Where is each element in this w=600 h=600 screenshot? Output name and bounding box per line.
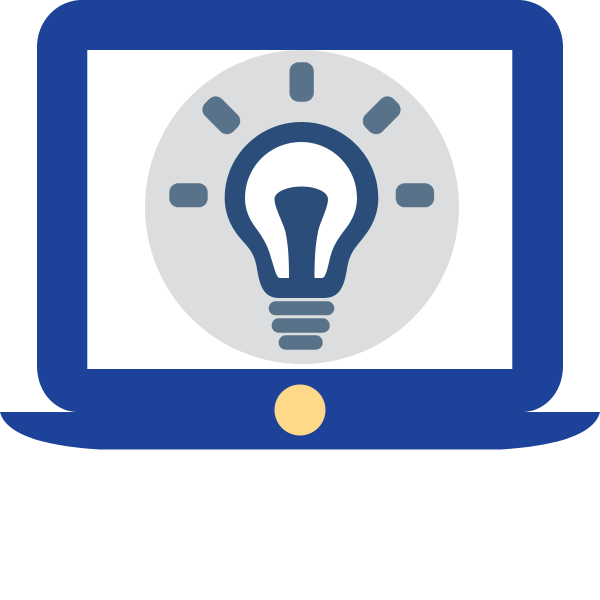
ray: top left	[199, 93, 244, 138]
laptop	[0, 0, 600, 450]
base ring 3	[279, 335, 323, 350]
ray: left	[169, 183, 208, 207]
ray: right	[396, 183, 434, 207]
grey circle background	[145, 50, 459, 364]
ray: top	[290, 62, 314, 102]
laptop screen	[87, 50, 512, 369]
base ring 2	[272, 318, 330, 333]
base ring 1	[269, 301, 334, 315]
laptop base	[0, 412, 600, 450]
bulb glass outline	[225, 122, 378, 298]
laptop body	[37, 0, 563, 412]
power button	[274, 384, 326, 436]
bulb screw base	[269, 301, 334, 350]
ray: top right	[359, 93, 404, 138]
light bulb icon	[145, 50, 459, 364]
bulb interior	[245, 142, 357, 278]
